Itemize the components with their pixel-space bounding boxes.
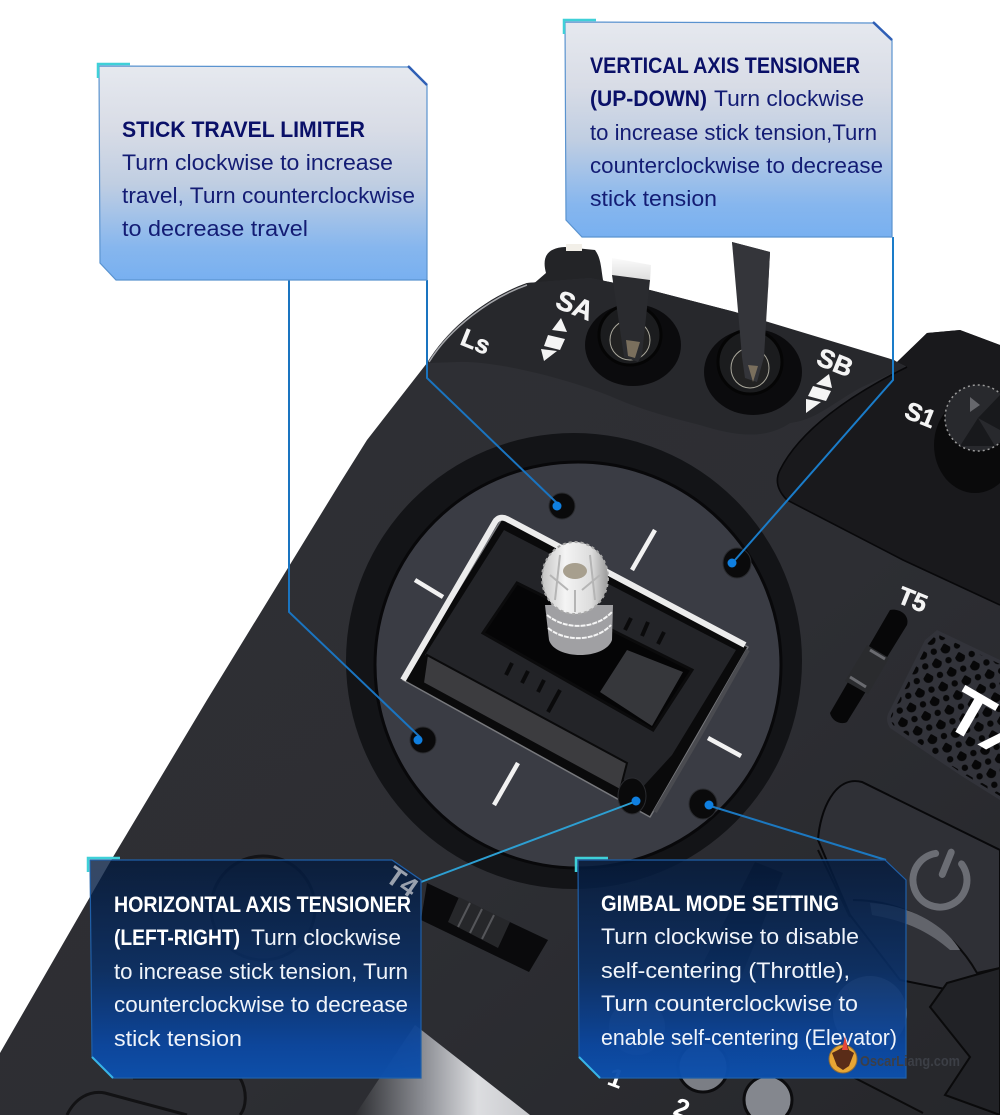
roller [423,655,627,790]
line: stick travel limiter upper screw [427,280,558,504]
screw marker dots [414,502,736,810]
button numerals: 1 [604,1061,628,1095]
silk labels: T5 [894,582,931,619]
left stick knob behind body [524,244,610,292]
heading [114,892,411,950]
heading: STICK TRAVEL LIMITER [122,117,365,142]
panel: stick travel limiter [98,64,427,280]
toggle lever SA top [612,258,651,282]
body text [590,86,883,211]
lower left shapes [67,1078,245,1115]
silk labels: SA [552,285,598,327]
connector lines [289,237,893,882]
speaker grille [887,630,1000,800]
S1 knob [934,385,1000,493]
body text: Turn clockwise [714,86,864,111]
watermark logo: OscarLiang.com [860,1053,960,1070]
body text: enable self-centering (Elevator) [601,1025,897,1050]
body text: counterclockwise to decrease [590,153,883,178]
body text: to increase stick tension, Turn [114,959,408,984]
T4 label seen through panel: T4 [381,860,424,903]
watermark logo [829,1036,960,1073]
gimbal outer ring [346,433,802,889]
body text [122,150,415,241]
grey slab [600,650,683,726]
body text: Turn clockwise to increase [122,150,393,175]
panel: gimbal mode setting [576,858,906,1078]
left round button [211,856,315,960]
transmitter photo illustration [0,242,1000,1115]
right unit [777,330,1000,605]
body text: Turn clockwise to disable [601,924,859,949]
power icon [905,842,976,915]
body text [601,924,897,1050]
body text: stick tension [114,1026,242,1051]
body text: Turn counterclockwise to [601,991,858,1016]
line: stick travel limiter lower screw [289,280,421,738]
heading [590,53,860,111]
gimbal plate [375,462,781,868]
heading: VERTICAL AXIS TENSIONER [590,53,860,78]
hidden slider behind panel [702,862,783,985]
curved highlight [870,903,960,950]
panel: vertical axis tensioner [564,20,892,237]
silk labels: S1 [901,397,940,434]
silk labels: Ls [457,324,494,360]
silk labels [457,285,940,619]
body text [114,925,408,1051]
line: vertical tensioner [735,237,893,560]
adjustment screw holes [410,493,751,819]
body text: Turn clockwise [251,925,401,950]
gimbal tick marks [415,530,741,805]
body text: self-centering (Throttle), [601,958,850,983]
body text: travel, Turn counterclockwise [122,183,415,208]
T5 slider [830,610,907,723]
toggle lever SB top [732,242,770,290]
top shoulder shading [427,278,905,435]
console seam lines [818,850,1000,1113]
switch SA socket [585,275,681,386]
body text: stick tension [590,186,717,211]
body text: counterclockwise to decrease [114,992,408,1017]
window [483,583,692,730]
line: horizontal tensioner [421,802,634,882]
right unit panel outline [777,367,1000,605]
lower right lower shape [930,968,1000,1115]
body text: to increase stick tension,Turn [590,120,877,145]
switch SB socket [704,242,802,415]
line: gimbal mode [707,805,886,860]
round grey buttons [609,976,907,1115]
heading: (LEFT-RIGHT) [114,925,240,950]
T4 slider [421,883,548,972]
silk labels: SB [813,342,857,383]
LCD screen corner [355,1025,530,1115]
speaker dots [891,634,1000,796]
gimbal square opening with bezel [403,517,748,817]
button numerals [604,1061,694,1115]
ridge highlight line [429,285,527,362]
scale ticks [506,618,664,712]
transmitter body [0,278,1000,1115]
heading: HORIZONTAL AXIS TENSIONER [114,892,411,917]
body text: to decrease travel [122,216,308,241]
gimbal stick knurled top [542,542,613,655]
heading: (UP-DOWN) [590,86,707,111]
heading: GIMBAL MODE SETTING [601,891,839,916]
lower right button panel [818,781,1000,1000]
panel: horizontal axis tensioner [88,858,424,1078]
